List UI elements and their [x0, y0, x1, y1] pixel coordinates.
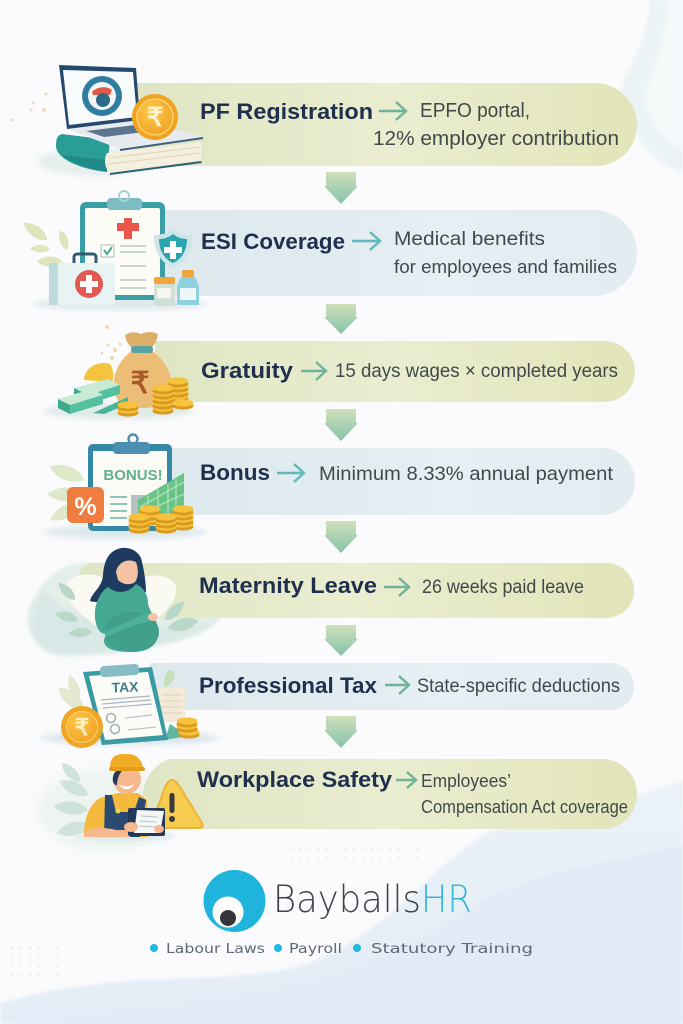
bar: Bonus	[170, 448, 635, 515]
arrow	[277, 464, 304, 482]
description: PF Registration	[373, 100, 619, 150]
icon: worker with helmet and warning sign	[53, 754, 203, 841]
arrow down 2	[324, 304, 358, 334]
arrow down 4	[324, 521, 358, 553]
arrow down 3	[324, 409, 358, 441]
heading: Gratuity: Gratuity	[201, 358, 294, 383]
heading: Professional Tax: Professional Tax	[199, 673, 378, 698]
bar: Maternity Leave	[75, 563, 634, 618]
icon: money bag, cash and coins	[43, 325, 194, 419]
logo: BayballsHR	[204, 870, 472, 932]
description: PF Registration: EPFO portal,	[420, 100, 530, 122]
arrow	[301, 362, 326, 380]
logo mark	[204, 870, 266, 932]
description: Workplace Safety	[421, 771, 628, 817]
heading: Maternity Leave: Maternity Leave	[199, 573, 377, 598]
step 4: Bonus	[43, 434, 635, 539]
arrow down 1	[324, 172, 358, 204]
tagline: Payroll	[289, 941, 342, 957]
icon: laptop on book with rupee coin: ₹	[147, 102, 163, 132]
icon: bonus clipboard, percent tile and coins	[43, 434, 207, 539]
description: Workplace Safety: Employees’	[421, 771, 511, 791]
description: ESI Coverage	[394, 229, 617, 277]
icon: tax clipboard and coins	[40, 664, 220, 748]
icon: bonus clipboard, percent tile and coins: %	[74, 493, 97, 521]
bar: Professional Tax	[150, 663, 634, 710]
icon: medical clipboard, shield and first aid kit	[21, 191, 208, 310]
background: bottom deeper wave	[0, 845, 683, 1024]
icon: pregnant woman with leaves	[31, 548, 215, 655]
bar: ESI Coverage	[160, 210, 637, 296]
description: Professional Tax: State-specific deductions	[417, 676, 620, 697]
description: Gratuity: 15 days wages × completed years	[335, 361, 618, 382]
heading: Bonus: Bonus	[200, 460, 270, 485]
description: PF Registration: 12% employer contribution	[373, 128, 619, 150]
step 1: PF Registration	[37, 65, 637, 176]
description: Maternity Leave: 26 weeks paid leave	[422, 577, 584, 598]
bar: Gratuity	[155, 341, 635, 402]
description: ESI Coverage: for employees and families	[394, 257, 617, 277]
icon: tax clipboard and coins: ₹	[75, 714, 90, 740]
description: Bonus: Minimum 8.33% annual payment	[319, 464, 614, 485]
tagline	[150, 941, 533, 957]
icon: tax clipboard and coins: TAX	[111, 679, 139, 695]
step 6: Professional Tax	[40, 663, 634, 748]
tagline: Labour Laws	[166, 941, 265, 957]
heading: PF Registration: PF Registration	[200, 99, 373, 124]
soft blob behind worker	[37, 768, 173, 852]
heading: Workplace Safety: Workplace Safety	[197, 767, 393, 792]
description: ESI Coverage: Medical benefits	[394, 229, 545, 250]
arrow down 5	[324, 625, 358, 656]
description: Workplace Safety: Compensation Act coverage	[421, 797, 628, 817]
arrow	[384, 578, 409, 596]
arrow	[385, 676, 409, 694]
heading: ESI Coverage: ESI Coverage	[201, 229, 345, 254]
bar: PF Registration	[135, 83, 637, 166]
arrow down 6	[324, 716, 358, 748]
step 7: Workplace Safety	[37, 754, 637, 852]
background: dot grids	[10, 835, 425, 977]
decorative confetti	[10, 92, 48, 122]
arrow	[396, 772, 416, 788]
arrow	[352, 232, 380, 250]
arrow	[379, 102, 406, 120]
background: bottom light wave	[0, 780, 683, 1024]
soft blob behind woman	[28, 563, 220, 655]
bar: Workplace Safety	[142, 759, 637, 829]
step 2: ESI Coverage	[21, 191, 637, 310]
tagline: Statutory Training	[371, 941, 533, 957]
step 3: Gratuity	[43, 325, 635, 419]
icon: bonus clipboard, percent tile and coins: BONUS!	[103, 467, 163, 484]
icon: money bag, cash and coins: ₹	[130, 367, 150, 400]
icon: laptop on book with rupee coin	[37, 65, 203, 176]
background: top-right swoosh	[622, 0, 683, 172]
step 5: Maternity Leave	[28, 548, 634, 655]
logo wordmark: BayballsHR	[273, 878, 472, 921]
